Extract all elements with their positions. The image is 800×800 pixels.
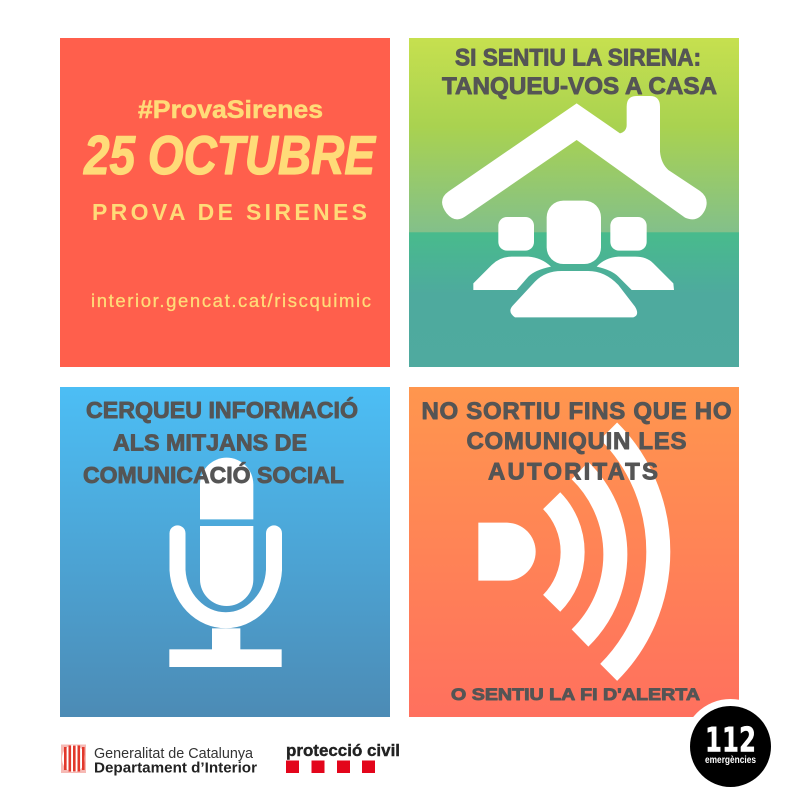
heading: media: [83, 396, 358, 488]
icon: shield: [61, 744, 86, 773]
heading: media: CERQUEU INFORMACIÓ: [86, 396, 358, 423]
logo: 112 emergències: [683, 699, 778, 794]
icon: house with people: [442, 96, 707, 317]
logo text: Departament d’Interior: [94, 760, 257, 776]
logo text: [94, 746, 257, 776]
panel: stay home: [409, 38, 739, 367]
heading: stay inside: AUTORITATS: [488, 458, 658, 486]
hashtag: #ProvaSirenes: [138, 96, 323, 124]
subtitle: PROVA DE SIRENES: [92, 199, 367, 225]
panel: date: [60, 38, 390, 367]
logo: protecció civil: [286, 741, 400, 773]
heading: media: ALS MITJANS DE: [113, 430, 307, 456]
icon: siren signal: [478, 431, 658, 672]
logo: Generalitat de Catalunya: [61, 744, 257, 776]
panel: media: [60, 387, 390, 717]
heading: stay home: [442, 44, 717, 100]
icon: microphone: [169, 458, 282, 667]
logo: 112 emergències: 112: [705, 720, 756, 760]
panel: stay inside: [409, 387, 739, 717]
website url: interior.gencat.cat/riscquimic: [91, 290, 371, 311]
heading: stay inside: COMUNIQUIN LES: [466, 428, 686, 455]
date heading: 25 OCTUBRE: [83, 124, 377, 186]
heading: stay inside: [422, 398, 732, 486]
logo: 112 emergències: emergències: [705, 755, 756, 766]
red squares: [286, 760, 375, 773]
heading: stay home: SI SENTIU LA SIRENA:: [455, 44, 701, 72]
heading: stay home: TANQUEU-VOS A CASA: [442, 73, 717, 100]
logo text: Generalitat de Catalunya: [94, 746, 254, 762]
heading: stay inside: NO SORTIU FINS QUE HO: [422, 398, 732, 425]
heading: media: COMUNICACIÓ SOCIAL: [83, 461, 344, 488]
note: end of alert: O SENTIU LA FI D'ALERTA: [451, 685, 700, 704]
logo: protecció civil: protecció civil: [286, 741, 400, 760]
